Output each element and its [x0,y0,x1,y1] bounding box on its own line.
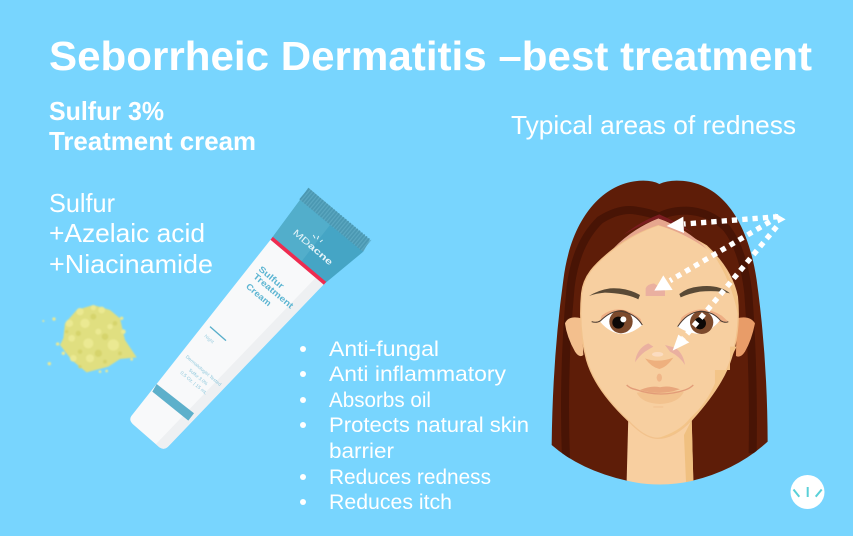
benefits list: Absorbs oil [329,389,431,412]
tube small print: 0.5 Oz. | 15 mL [179,370,208,396]
face heading: Typical areas of redness [511,110,796,140]
eye right [678,309,728,334]
face shade [657,347,737,438]
forehead redness [646,283,665,296]
tube small print [179,334,223,396]
tube small print: Night [203,334,215,345]
tube band [152,384,194,421]
benefits list: Anti inflammatory [329,363,507,386]
arrows [670,217,778,338]
ingredients list: Sulfur [49,188,115,218]
tube product name: Sulfur [257,264,287,291]
tube brand: MDacne [291,227,335,267]
tube small print: Sulfur 3.0% [188,368,209,386]
nose redness [635,343,653,362]
benefits list [300,338,529,514]
product heading [49,96,256,156]
ear left [565,317,583,356]
benefits list: Protects natural skin [329,414,529,437]
benefits list: Reduces redness [329,466,491,489]
tube product name [244,264,296,311]
ingredients list: +Azelaic acid [49,218,205,248]
product tube [130,188,370,449]
ear right [736,317,755,357]
benefits list: barrier [329,440,394,463]
benefits list: Reduces itch [329,491,452,514]
neck [627,417,693,484]
eye left [592,309,642,334]
hair shadow [565,210,753,460]
benefits list: Anti-fungal [329,338,439,361]
ingredients list [49,188,213,279]
tube crimp [300,188,370,252]
icon: sulfur powder [42,305,137,373]
tube red stripe [272,238,325,283]
product heading: Treatment cream [49,126,256,156]
tube cap [272,200,363,283]
hairline redness [613,218,707,249]
eyebrows [589,288,640,299]
icon: logo badge [790,475,824,509]
hair [552,181,768,481]
tube body [130,238,324,449]
product heading: Sulfur 3% [49,96,164,126]
ingredients list: +Niacinamide [49,249,213,279]
tube product name: Cream [244,281,274,308]
face [581,225,738,438]
chin and lips [637,391,684,404]
nose [645,358,673,369]
tube small print: Dermatologist Tested [185,354,223,387]
tube product name: Treatment [251,271,296,311]
title: Seborrheic Dermatitis –best treatment [49,33,812,79]
face illustration [552,181,786,484]
